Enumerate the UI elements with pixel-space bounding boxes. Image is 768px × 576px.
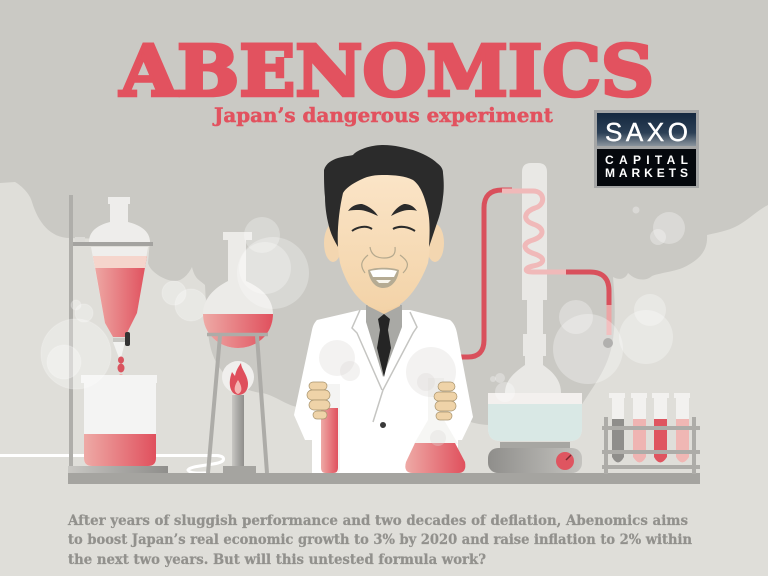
eyebrows <box>348 204 417 216</box>
scientist <box>294 145 473 473</box>
left hand <box>307 382 330 419</box>
outlet tube <box>566 272 613 348</box>
red tube behind scientist <box>460 190 512 357</box>
lab coat <box>294 310 473 473</box>
logo: Saxo Capital Markets: CAPITAL <box>605 153 688 167</box>
beaker <box>81 375 157 466</box>
bench swirl <box>0 455 224 473</box>
logo: Saxo Capital Markets: MARKETS <box>605 166 688 180</box>
nose and cheek lines <box>362 247 407 273</box>
intro text: to boost Japan’s real economic growth to 3% by 2020 and raise inflation to 2% within <box>68 532 692 548</box>
burner <box>222 361 256 473</box>
right hand <box>434 382 457 420</box>
bubbles right <box>490 206 685 402</box>
erlenmeyer flask held in hand <box>405 378 465 473</box>
coat lapels <box>352 310 417 422</box>
neck <box>368 296 400 314</box>
ears <box>324 224 444 262</box>
hair <box>324 145 444 247</box>
intro text <box>67 513 692 568</box>
bubbles left <box>41 281 207 389</box>
test tube held in hand <box>321 384 340 473</box>
intro text: After years of sluggish performance and two decades of deflation, Abenomics aims <box>67 513 688 529</box>
distillation condenser <box>502 163 567 393</box>
separating funnel <box>89 197 150 382</box>
test tube rack <box>602 393 700 474</box>
retort stand <box>68 195 168 473</box>
bubbles over flask <box>237 217 309 309</box>
bubbles over scientist <box>319 340 456 446</box>
face <box>337 170 431 310</box>
subtitle: Japan’s dangerous experiment <box>212 103 554 127</box>
round flask <box>203 232 273 348</box>
coat button <box>380 422 386 428</box>
tie <box>377 314 391 377</box>
intro text: the next two years. But will this untested formula work? <box>68 552 486 568</box>
shirt and neck <box>366 305 402 377</box>
tripod stand <box>207 334 268 473</box>
hot plate with basin <box>488 393 582 473</box>
title: ABENOMICS <box>119 30 654 112</box>
mouth <box>368 268 399 288</box>
smoke cloud <box>0 0 768 426</box>
logo: Saxo Capital Markets <box>594 110 699 188</box>
logo: Saxo Capital Markets: SAXO <box>605 117 688 147</box>
bench top <box>68 473 700 484</box>
eyes <box>352 227 415 231</box>
